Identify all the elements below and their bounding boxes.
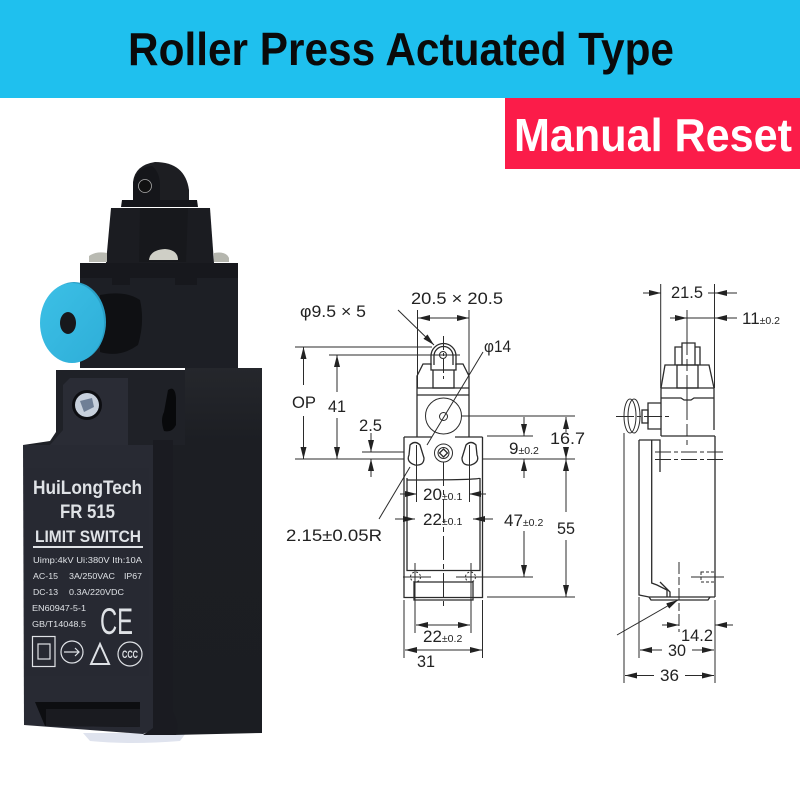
- leader: phi 14: [427, 352, 483, 445]
- head: [106, 208, 214, 263]
- dimension: 36: [625, 674, 714, 676]
- dimension: 47: [523, 531, 525, 577]
- triangle icon: [91, 644, 109, 664]
- dimension: 9: [523, 417, 525, 478]
- CCC icon: [118, 642, 142, 666]
- front view centre lines: [442, 336, 444, 380]
- product label: 3A/250VAC: [69, 571, 115, 581]
- product label: Uimp:4kV Ui:380V Ith:10A: [33, 555, 142, 565]
- dimension: 22 upper: [395, 518, 493, 520]
- side view outline: [624, 343, 715, 600]
- front view outline: [404, 344, 482, 600]
- front view labels: 20.5 × 20.5: [411, 289, 503, 308]
- dimension: 30: [640, 649, 714, 651]
- dimension: 14.2: [662, 624, 733, 626]
- product label: FR 515: [60, 502, 115, 523]
- side view labels: [660, 283, 780, 685]
- housing front: [23, 445, 153, 734]
- dimension: 22 lower: [416, 624, 470, 626]
- mounting screw: [72, 390, 102, 420]
- front view dimension drawing: [295, 310, 575, 658]
- front view labels: 2.15±0.05R: [286, 526, 382, 545]
- dimension: 55: [565, 540, 567, 597]
- front view labels: 41: [328, 397, 346, 416]
- front view labels: φ14: [484, 337, 511, 356]
- bottom notch: [35, 702, 140, 727]
- leader: bottom: [617, 600, 678, 635]
- base reflection: [83, 733, 186, 743]
- dimension: 11: [670, 317, 737, 319]
- front view labels: 22±0.1: [423, 510, 462, 529]
- product photo: limit switch: [23, 162, 262, 743]
- product label: IP67: [124, 571, 142, 581]
- front view labels: 31: [417, 652, 435, 671]
- front view labels: 55: [557, 519, 575, 538]
- side view labels: 36: [660, 666, 679, 685]
- roller: [121, 162, 198, 207]
- product label: AC-15: [33, 571, 58, 581]
- product label: EN60947-5-1: [32, 603, 86, 613]
- dimension: 20.5 x 20.5: [418, 317, 469, 319]
- lower housing side: [173, 368, 262, 735]
- leader: radius: [379, 467, 410, 519]
- housing side strip: [143, 440, 177, 735]
- screws: [89, 249, 229, 262]
- stem of reset button: [100, 293, 142, 354]
- upper block: [80, 263, 238, 368]
- side view labels: 14.2: [681, 626, 713, 645]
- double insulation icon: [32, 636, 55, 666]
- product label: HuiLongTech: [33, 478, 142, 499]
- product label: DC-13: [33, 587, 58, 597]
- front view labels: 2.5: [359, 416, 382, 435]
- header banner: [0, 0, 800, 98]
- product label: [25, 468, 149, 676]
- side view dimension drawing: [616, 284, 737, 683]
- dimension: 31: [405, 649, 482, 651]
- arrow circle icon: [61, 641, 83, 663]
- side view labels: 11±0.2: [742, 309, 780, 328]
- extension lines: [624, 284, 715, 683]
- front view labels: [286, 289, 585, 671]
- front view labels: 16.7: [550, 429, 585, 448]
- front view labels: OP: [292, 393, 316, 412]
- front view labels: 20±0.1: [423, 485, 462, 504]
- product label: LIMIT SWITCH: [35, 527, 141, 546]
- CE mark: CE: [100, 601, 133, 642]
- dimension: 41: [336, 355, 338, 459]
- front view labels: 9±0.2: [509, 439, 539, 458]
- dimension: 20: [400, 493, 486, 495]
- front view labels: 47±0.2: [504, 511, 543, 530]
- leader: roller diameter: [398, 310, 434, 345]
- blue reset button: [40, 282, 106, 363]
- dimension: 21.5: [643, 292, 737, 294]
- dimension: 2.5: [370, 433, 372, 477]
- dimension: OP: [302, 347, 304, 459]
- front view labels: φ9.5 × 5: [300, 302, 366, 321]
- product label: 0.3A/220VDC: [69, 587, 124, 597]
- front view labels: 22±0.2: [423, 627, 462, 646]
- mounting slot: [162, 389, 176, 431]
- product label: GB/T14048.5: [32, 619, 86, 629]
- dimension: 16.7: [565, 417, 567, 512]
- side view labels: 21.5: [671, 283, 703, 302]
- housing shoulder: [23, 370, 185, 445]
- raised mounting pad: [50, 378, 128, 445]
- CCC icon: CCC: [122, 649, 138, 661]
- title: Roller Press Actuated Type: [128, 23, 674, 75]
- side view centre lines: [686, 310, 688, 445]
- extension lines: [295, 310, 575, 658]
- side view labels: 30: [668, 641, 686, 660]
